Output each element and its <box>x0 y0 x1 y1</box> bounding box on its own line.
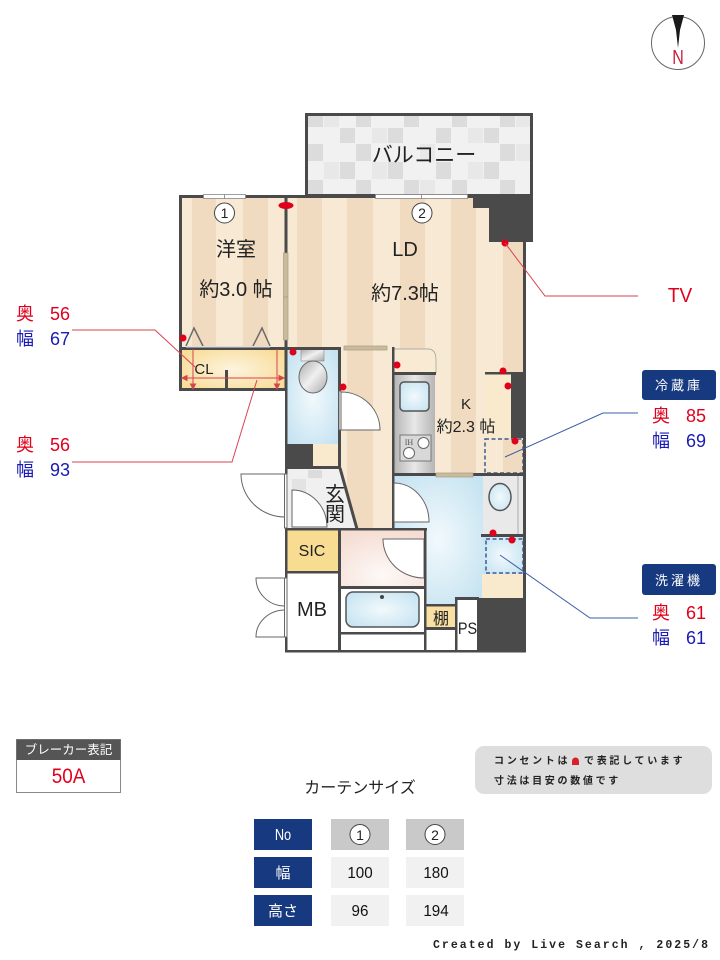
western room floor <box>180 197 285 349</box>
size label: closet upper <box>16 304 70 349</box>
room label: LD: 約7.3帖 <box>371 282 439 305</box>
sliding doors <box>284 253 473 477</box>
fridge label: 69 <box>686 431 706 451</box>
PS <box>457 600 477 650</box>
note box: コンセントは <box>494 755 570 767</box>
note box: で表記しています <box>584 754 685 767</box>
room label: kitchen: 約2.3 帖 <box>437 418 495 436</box>
washer space <box>482 537 523 598</box>
row headers: No <box>275 827 291 844</box>
curtain size table <box>254 819 464 926</box>
washer label: 幅 <box>652 628 670 648</box>
closet doors <box>186 328 270 348</box>
TV label: TV <box>668 285 692 307</box>
hallway floor <box>341 349 392 529</box>
washstand <box>483 476 523 534</box>
credit line: Created by Live Search , 2025/8 <box>433 939 708 952</box>
washer label <box>642 564 716 648</box>
size label: closet upper: 56 <box>50 304 70 324</box>
kitchen counter: IH <box>405 438 413 447</box>
row headers: 幅 <box>275 865 291 882</box>
size label: closet upper: 67 <box>50 329 70 349</box>
room label: kitchen <box>437 396 495 436</box>
breaker box: ブレーカー表記 <box>25 742 113 757</box>
shelf: 棚 <box>433 610 449 628</box>
column 1: 96 <box>352 903 368 920</box>
column 1: 100 <box>347 865 373 882</box>
fridge label: 85 <box>686 406 706 426</box>
room label: LD: LD <box>392 239 418 261</box>
washroom floor <box>394 476 483 604</box>
kitchen counter <box>394 374 435 474</box>
leader line: washer <box>500 555 638 618</box>
room label: LD: 2 <box>418 205 426 221</box>
room label: LD <box>371 203 439 305</box>
row headers: 高さ <box>268 903 298 920</box>
room label: western room: 洋室 <box>216 238 256 261</box>
note box: 寸法は目安の数値です <box>494 774 621 787</box>
column 1 <box>331 819 389 926</box>
row headers <box>254 819 312 926</box>
fridge label: 幅 <box>652 431 670 451</box>
size label: closet upper: 幅 <box>16 329 34 349</box>
fridge label: 奥 <box>652 406 670 426</box>
leader line: TV <box>505 243 638 296</box>
column 2 <box>406 819 464 926</box>
walls <box>179 195 533 652</box>
washer label: 奥 <box>652 603 670 623</box>
fridge alcove <box>485 374 523 473</box>
closet label and measure arrows <box>182 349 284 389</box>
floor plan <box>179 114 533 652</box>
room label: western room: 約3.0 帖 <box>199 278 273 301</box>
bathtub <box>341 589 424 632</box>
entrance: 関 <box>325 504 345 526</box>
curtain size heading: カーテンサイズ <box>304 779 416 797</box>
shelf <box>426 606 455 628</box>
MB: MB <box>297 599 327 621</box>
SIC: SIC <box>299 543 325 560</box>
closet label and measure arrows: CL <box>194 361 214 378</box>
windows <box>204 194 468 198</box>
kitchen cabinet <box>394 349 436 373</box>
doors <box>241 391 429 637</box>
washer label: 61 <box>686 628 706 648</box>
LD and kitchen floor <box>287 197 524 529</box>
column 1: 1 <box>356 827 364 843</box>
size label: closet lower: 93 <box>50 460 70 480</box>
leader line: closet depth <box>72 330 195 367</box>
washer label: 61 <box>686 603 706 623</box>
column 2: 194 <box>423 903 449 920</box>
bathroom changing area <box>341 530 424 586</box>
entrance <box>288 468 357 529</box>
balcony: バルコニー <box>372 144 476 167</box>
SIC <box>287 530 338 571</box>
toilet room <box>287 349 339 467</box>
column 2: 2 <box>431 827 439 843</box>
size label: closet lower <box>16 435 70 480</box>
closet <box>180 348 285 390</box>
MB <box>287 573 338 650</box>
fridge label: 冷蔵庫 <box>655 378 703 393</box>
white fixtures below tub and shelf <box>341 630 455 650</box>
washer label: 洗濯機 <box>655 573 703 588</box>
entrance: 玄 <box>325 483 345 506</box>
leader line: closet width <box>72 380 257 462</box>
breaker box: 50A <box>52 765 86 788</box>
room label: western room: 1 <box>221 205 229 221</box>
size label: closet upper: 奥 <box>16 304 34 324</box>
room label: kitchen: K <box>461 396 471 413</box>
compass: north <box>652 15 704 70</box>
size label: closet lower: 幅 <box>16 460 34 480</box>
room label: western room <box>199 203 273 301</box>
note box <box>475 746 712 794</box>
size label: closet lower: 56 <box>50 435 70 455</box>
size label: closet lower: 奥 <box>16 435 34 455</box>
PS: PS <box>458 620 477 638</box>
fridge label <box>642 370 716 451</box>
leader line: fridge <box>505 413 638 457</box>
breaker box <box>16 740 120 792</box>
outlets <box>180 202 518 544</box>
column 2: 180 <box>423 865 449 882</box>
balcony <box>306 114 532 196</box>
compass: north: N <box>672 46 684 68</box>
